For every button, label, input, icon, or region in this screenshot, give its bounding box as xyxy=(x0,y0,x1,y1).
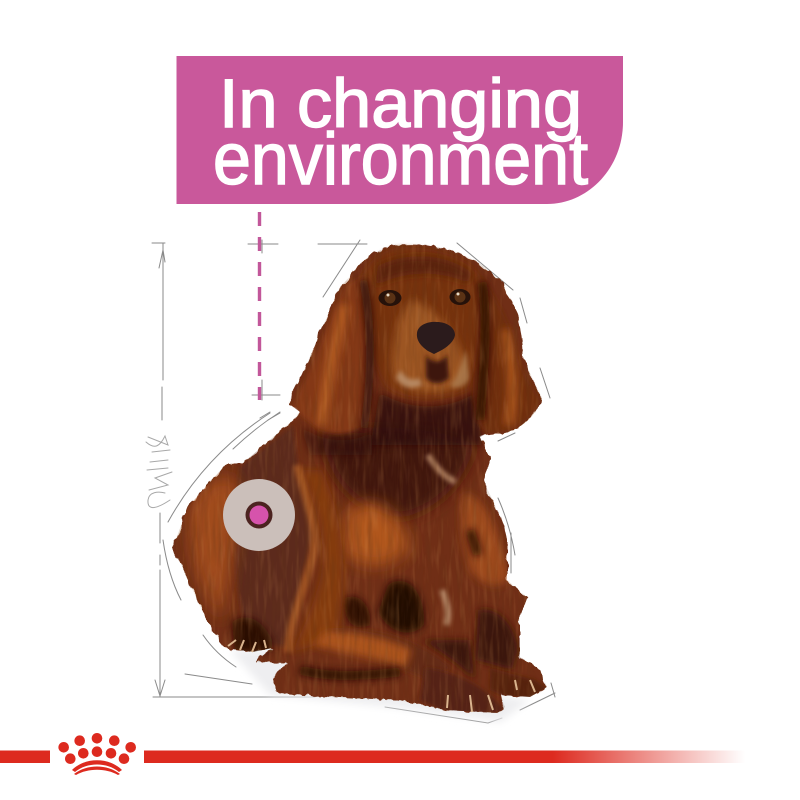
dog silhouette base xyxy=(173,245,547,713)
dog neck shadow xyxy=(370,392,482,445)
dog right ear shading xyxy=(473,275,542,434)
handwritten dimension scribble xyxy=(146,436,172,508)
dog left ear shading xyxy=(292,275,370,434)
floor shadow xyxy=(230,650,530,722)
dog eyes xyxy=(378,289,470,306)
dog illustration xyxy=(172,244,547,713)
title text xyxy=(213,65,588,200)
title text: environment xyxy=(213,119,588,200)
footer red bar left xyxy=(0,750,50,763)
dog toes xyxy=(228,640,535,712)
dog shadow under left ear xyxy=(300,425,372,455)
icon: royal crown logo xyxy=(58,733,136,775)
dashed callout line xyxy=(258,212,261,400)
dog chest xyxy=(320,427,518,680)
title text: In changing xyxy=(219,65,582,142)
dog front leg and lying paw xyxy=(288,465,548,714)
dog nose xyxy=(417,322,455,354)
footer red bar right xyxy=(144,750,745,763)
dog muzzle details xyxy=(396,350,469,388)
dog fur texture xyxy=(176,244,547,713)
dog head xyxy=(360,247,485,428)
highlight circle marker xyxy=(223,479,295,551)
technical sketch lines xyxy=(146,240,555,723)
title banner xyxy=(176,56,623,204)
dog interior shading xyxy=(189,275,548,714)
dog hindquarters and tail xyxy=(189,425,313,652)
